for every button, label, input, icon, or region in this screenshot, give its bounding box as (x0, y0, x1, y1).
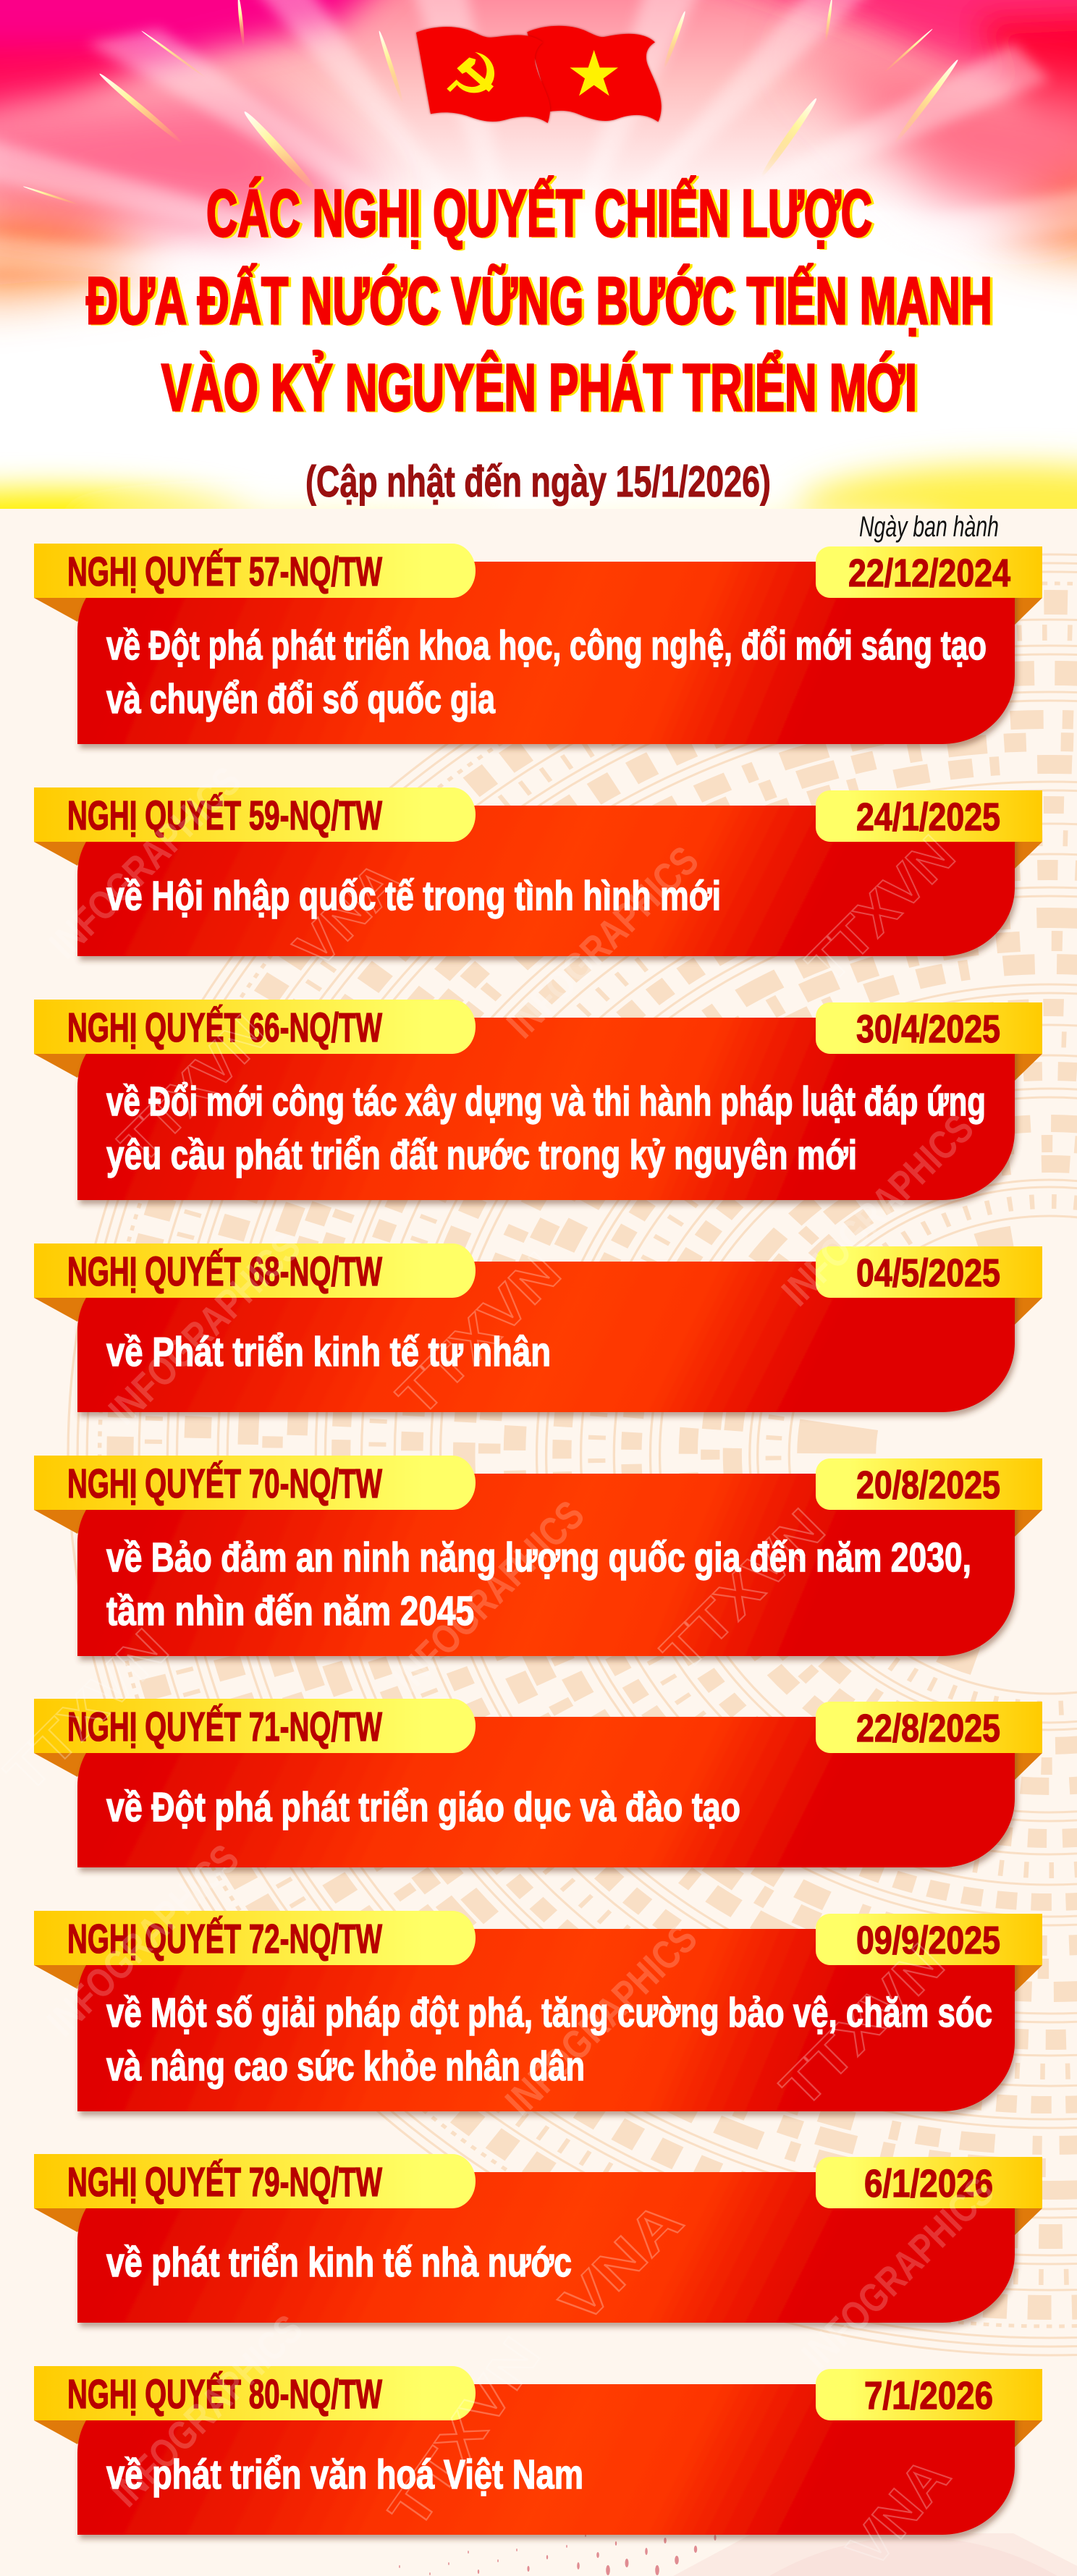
panel: resolution 70 (34, 1456, 1042, 1656)
panel: resolution 59: 24/1/2025 (856, 795, 1000, 839)
panel: resolution 66: yêu cầu phát triển đất nước trong kỷ nguyên mới (106, 1132, 857, 1178)
panel: resolution 66: 30/4/2025 (856, 1008, 1000, 1051)
watermarks: VNA (283, 850, 413, 980)
panel: resolution 71: NGHỊ QUYẾT 71-NQ/TW (67, 1703, 382, 1750)
watermarks: INFOGRAPHICS (793, 2169, 1002, 2378)
panel: resolution 68 (34, 1243, 1042, 1412)
header banner (0, 0, 1077, 559)
background: pale pink shapes at bottom (673, 2533, 1077, 2576)
column label: issue date: Ngày ban hành (859, 511, 999, 543)
watermarks: INFOGRAPHICS (497, 1915, 706, 2124)
watermarks: VNA (836, 2446, 962, 2576)
watermarks: TTXVN (107, 1003, 279, 1175)
panel: resolution 59: NGHỊ QUYẾT 59-NQ/TW (67, 792, 382, 839)
watermarks: INFOGRAPHICS (38, 1836, 248, 2045)
panel: resolution 57: 22/12/2024 (848, 552, 1010, 595)
icon: waving flags (416, 26, 662, 123)
panel: resolution 71 (34, 1699, 1042, 1867)
panel: resolution 70: 20/8/2025 (856, 1464, 1000, 1507)
panel: resolution 57 (34, 544, 1042, 744)
icon: national flag with star (527, 26, 662, 122)
watermarks: TTXVN (795, 824, 966, 995)
subtitle: update date: (Cập nhật đến ngày 15/1/2026) (305, 457, 771, 506)
panel: resolution 80: 7/1/2026 (864, 2374, 993, 2417)
panel: resolution 68: NGHỊ QUYẾT 68-NQ/TW (67, 1248, 382, 1295)
panel: resolution 80: NGHỊ QUYẾT 80-NQ/TW (67, 2370, 382, 2417)
watermarks (0, 758, 1002, 2576)
watermarks: INFOGRAPHICS (100, 1224, 309, 1433)
watermarks: TTXVN (377, 2326, 552, 2540)
watermarks: INFOGRAPHICS (498, 837, 707, 1047)
panel: resolution 59: về Hội nhập quốc tế trong tình hình mới (106, 873, 721, 919)
panel: resolution 70: tầm nhìn đến năm 2045 (106, 1588, 474, 1634)
watermarks: TTXVN (769, 1933, 956, 2119)
background: pink dots (399, 2534, 717, 2575)
icon: party flag with hammer and sickle (416, 27, 550, 123)
background: bronze drum pattern (68, 554, 1077, 2355)
panel: resolution 66: NGHỊ QUYẾT 66-NQ/TW (67, 1004, 382, 1051)
panel: resolution 68: 04/5/2025 (856, 1251, 1000, 1295)
watermarks: INFOGRAPHICS (384, 1492, 593, 1701)
watermarks: TTXVN (386, 1241, 573, 1428)
panel: resolution 72 (34, 1911, 1042, 2111)
panel: resolution 79: 6/1/2026 (864, 2162, 993, 2205)
panel: resolution 71: 22/8/2025 (856, 1707, 1000, 1750)
watermarks: INFOGRAPHICS (41, 758, 250, 967)
panel: resolution 71: về Đột phá phát triển giáo dục và đào tạo (106, 1784, 740, 1830)
panel: resolution 57: và chuyển đổi số quốc gia (106, 676, 496, 722)
panel: resolution 80 (34, 2366, 1042, 2535)
panel: resolution 68: về Phát triển kinh tế tư nhân (106, 1329, 551, 1375)
watermarks: TTXVN (650, 1498, 837, 1684)
header sparkles (22, 0, 960, 206)
panel: resolution 66 (34, 1000, 1042, 1200)
panel: resolution 59 (34, 787, 1042, 956)
panel: resolution 57: NGHỊ QUYẾT 57-NQ/TW (67, 548, 382, 595)
panel: resolution 80: về phát triển văn hoá Việt Nam (106, 2452, 583, 2498)
watermarks: INFOGRAPHICS (102, 2306, 311, 2515)
panel: resolution 72: và nâng cao sức khỏe nhân dân (106, 2043, 585, 2090)
panel: resolution 79 (34, 2154, 1042, 2323)
panel: resolution 70: NGHỊ QUYẾT 70-NQ/TW (67, 1460, 382, 1507)
watermarks: VNA (549, 2189, 695, 2336)
panel: resolution 72: NGHỊ QUYẾT 72-NQ/TW (67, 1915, 382, 1962)
header background: light burst (0, 0, 1077, 559)
panel: resolution 79: về phát triển kinh tế nhà nước (106, 2239, 572, 2286)
watermarks: INFOGRAPHICS (773, 1105, 982, 1314)
panel: resolution 79: NGHỊ QUYẾT 79-NQ/TW (67, 2158, 382, 2205)
panel: resolution 72: 09/9/2025 (856, 1919, 1000, 1962)
title (86, 176, 992, 425)
